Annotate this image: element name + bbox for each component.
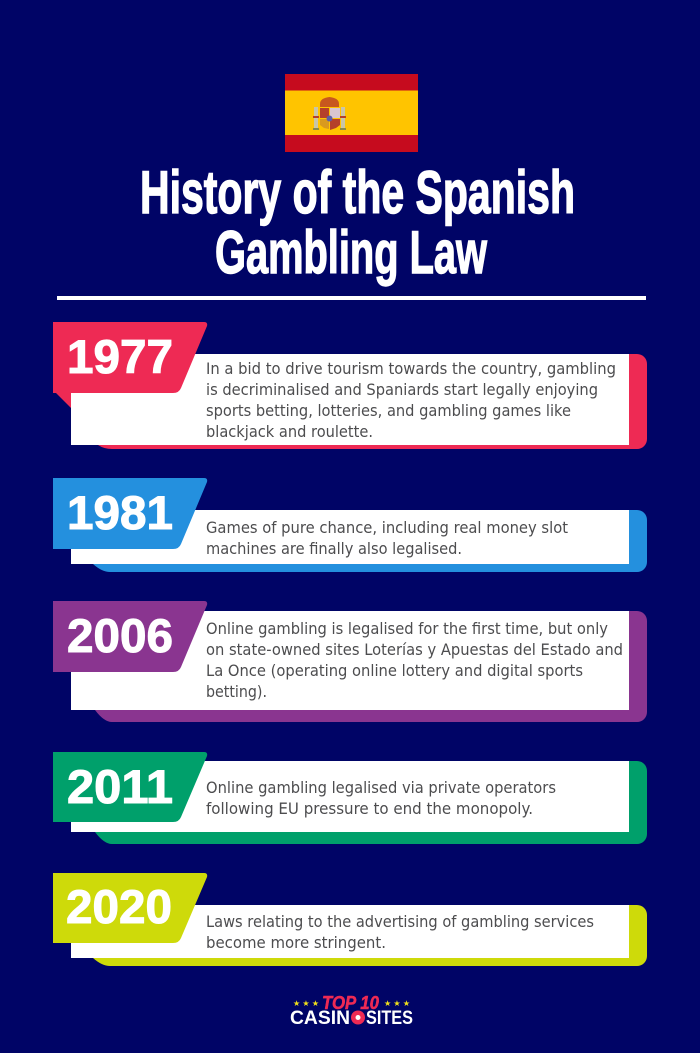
text: 2020 description [206,912,594,952]
text: 2006 description: on state-owned sites Loterías y Apuestas del Estado and [206,640,623,659]
text: 2011 description [206,778,556,818]
year tag: 1977 [53,322,207,393]
year tag: 2011: 2011 [67,760,173,813]
text: 1977 description: sports betting, lotteries, and gambling games like [206,401,571,420]
logo: Top 10 Casino Sites: TOP 10 [322,993,379,1013]
year tag: 1981: 1981 [67,486,173,539]
logo: Top 10 Casino Sites: CASIN [290,1008,350,1029]
text: 2011 description: following EU pressure to end the monopoly. [206,799,533,818]
divider [57,296,646,300]
title: Gambling Law [215,219,487,286]
icon: Spanish flag [285,74,418,152]
logo: Top 10 Casino Sites: ★★★ [384,999,411,1008]
logo: Top 10 Casino Sites: ★★★ [293,999,320,1008]
text: 1977 description: In a bid to drive tourism towards the country, gambling [206,359,616,378]
panel: 1981 [53,478,647,572]
title [140,159,575,286]
year tag: 1981 [53,478,207,549]
logo: Top 10 Casino Sites: SITES [366,1008,413,1029]
text: 2006 description [206,619,623,701]
year tag: 2006 [53,601,207,672]
panel: 1977 [53,322,647,449]
text: 2011 description: Online gambling legalised via private operators [206,778,556,797]
text: 1981 description: machines are finally also legalised. [206,539,462,558]
panel: 2020 [53,873,647,966]
text: 2006 description: Online gambling is legalised for the first time, but only [206,619,608,638]
panel: 2006 [53,601,647,722]
year tag: 1977: 1977 [67,330,173,383]
text: 2006 description: La Once (operating online lottery and digital sports [206,661,583,680]
year tag: 2011 [53,752,207,822]
text: 2006 description: betting). [206,682,267,701]
year tag: 2006: 2006 [67,609,173,662]
text: 1981 description [206,518,568,558]
text: 1977 description: blackjack and roulette. [206,422,373,441]
text: 1981 description: Games of pure chance, including real money slot [206,518,568,537]
text: 1977 description [206,359,616,441]
text: 1977 description: is decriminalised and Spaniards start legally enjoying [206,380,598,399]
text: 2020 description: Laws relating to the advertising of gambling services [206,912,594,931]
logo: Top 10 Casino Sites [290,993,413,1029]
panel: 2011 [53,752,647,844]
year tag: 2020: 2020 [66,880,172,933]
year tag: 2020 [53,873,207,943]
text: 2020 description: become more stringent. [206,933,386,952]
